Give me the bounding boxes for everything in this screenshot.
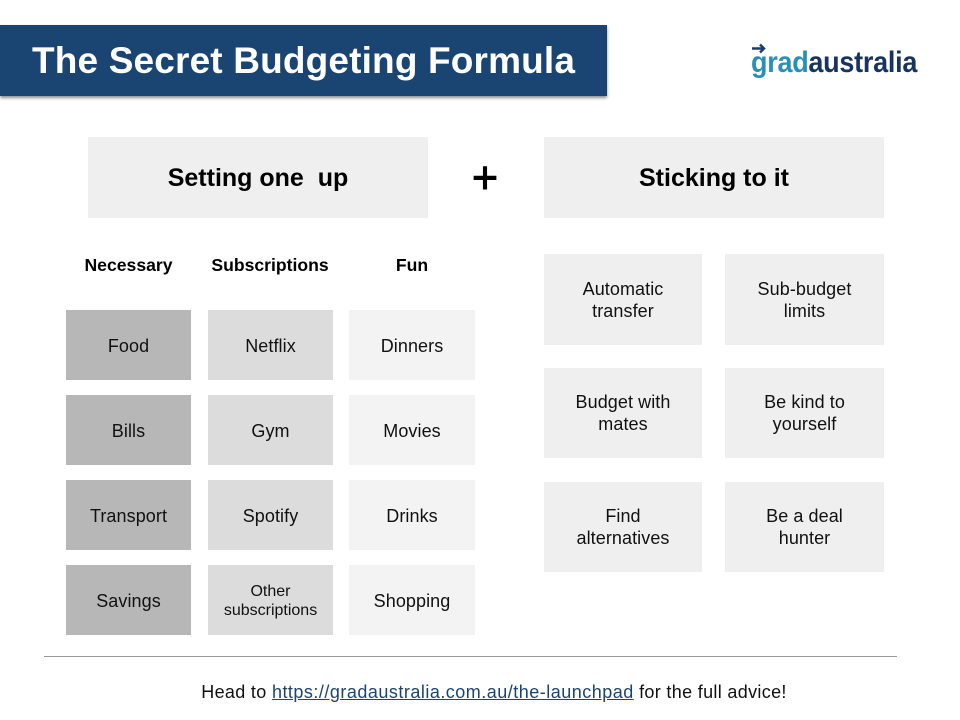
tip: Find alternatives	[544, 482, 702, 572]
item: Dinners	[349, 310, 475, 380]
tip: Automatic transfer: Automatic	[583, 278, 663, 298]
item: Savings	[66, 565, 191, 635]
footer text with link: Head to https://gradaustralia.com.au/the-launchpad for the full advice!	[201, 682, 787, 702]
item: Transport: Transport	[90, 506, 167, 526]
item: Transport	[66, 480, 191, 550]
heading: Setting one up	[88, 137, 428, 218]
item: Dinners: Dinners	[381, 336, 443, 356]
item: Movies: Movies	[383, 421, 441, 441]
column heading: Necessary: Necessary	[84, 255, 173, 275]
item: Shopping	[349, 565, 475, 635]
logo: gradaustralia: gradaustralia	[751, 46, 917, 79]
tip: Budget with mates: Budget with	[576, 392, 670, 412]
item: Drinks: Drinks	[386, 506, 438, 526]
plus sign: +	[472, 152, 498, 203]
tip: Automatic transfer	[544, 254, 702, 345]
item: Other subscriptions: Other	[250, 583, 290, 600]
tip: Be a deal hunter	[725, 482, 884, 572]
heading: Sticking to it: Sticking to it	[639, 164, 789, 192]
item: Netflix: Netflix	[245, 336, 296, 356]
tip: Automatic transfer: transfer	[592, 300, 654, 320]
column heading: Fun: Fun	[396, 255, 428, 275]
item: Bills	[66, 395, 191, 465]
item: Food	[66, 310, 191, 380]
heading: Sticking to it	[544, 137, 884, 218]
title banner	[0, 25, 607, 96]
tip: Sub-budget limits: limits	[784, 300, 825, 320]
tip: Sub-budget limits	[725, 254, 884, 345]
item: Savings: Savings	[96, 591, 161, 611]
item: Other subscriptions: subscriptions	[224, 602, 317, 619]
item: Bills: Bills	[112, 421, 145, 441]
item: Netflix	[208, 310, 333, 380]
tip: Sub-budget limits: Sub-budget	[758, 278, 851, 298]
tip: Find alternatives: Find	[605, 506, 641, 526]
item: Gym	[208, 395, 333, 465]
tip: Budget with mates	[544, 368, 702, 458]
tip: Budget with mates: mates	[598, 414, 648, 434]
column heading: Subscriptions: Subscriptions	[211, 255, 329, 275]
heading: Setting one up: Setting one up	[168, 164, 348, 192]
tip: Be kind to yourself: Be kind to	[764, 392, 845, 412]
tip: Be a deal hunter: Be a deal	[766, 506, 843, 526]
item: Gym: Gym	[251, 421, 290, 441]
item: Movies	[349, 395, 475, 465]
item: Spotify: Spotify	[243, 506, 298, 526]
tip: Be kind to yourself	[725, 368, 884, 458]
item: Drinks	[349, 480, 475, 550]
item: Shopping: Shopping	[374, 591, 450, 611]
item: Food: Food	[108, 336, 149, 356]
tip: Be a deal hunter: hunter	[779, 528, 830, 548]
item: Spotify	[208, 480, 333, 550]
tip: Find alternatives: alternatives	[576, 528, 670, 548]
tip: Be kind to yourself: yourself	[773, 414, 836, 434]
title banner: The Secret Budgeting Formula	[32, 40, 575, 81]
item: Other subscriptions	[208, 565, 333, 635]
